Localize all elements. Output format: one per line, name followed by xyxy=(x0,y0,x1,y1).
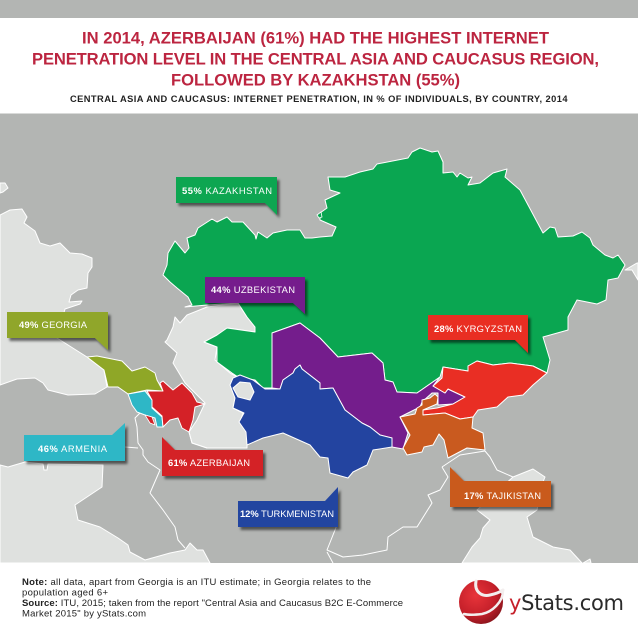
map xyxy=(0,114,638,563)
label: Georgia: 49% GEORGIA xyxy=(19,319,88,330)
country: Kyrgyzstan xyxy=(423,361,547,419)
label: Turkmenistan xyxy=(238,487,338,527)
title: IN 2014, AZERBAIJAN (61%) HAD THE HIGHEST INTERNET xyxy=(82,28,549,48)
label: Georgia xyxy=(7,312,108,350)
footnote text: population aged 6+ xyxy=(22,588,108,598)
footnote text: Source: ITU, 2015; taken from the report "Central Asia and Caucasus B2C E-Commerce xyxy=(22,598,403,609)
country: Turkmenistan xyxy=(230,365,392,478)
map background xyxy=(0,114,638,563)
country: Kazakhstan xyxy=(163,148,625,393)
top band xyxy=(0,0,638,18)
logo: yStats.com xyxy=(459,580,624,624)
label: Azerbaijan: 61% AZERBAIJAN xyxy=(168,457,250,468)
Kazakhstan exclave detail xyxy=(317,212,322,218)
country: Armenia xyxy=(128,391,163,427)
label: Uzbekistan: 44% UZBEKISTAN xyxy=(211,284,295,295)
label: Kazakhstan xyxy=(176,177,277,215)
subtitle: CENTRAL ASIA AND CAUCASUS: INTERNET PENETRATION, IN % OF INDIVIDUALS, BY COUNTRY, 2014 xyxy=(70,94,568,104)
header panel xyxy=(0,18,638,114)
logo sphere xyxy=(459,580,503,624)
label: Turkmenistan: 12% TURKMENISTAN xyxy=(240,508,334,519)
label: Armenia: 46% ARMENIA xyxy=(38,443,108,454)
logo swoosh xyxy=(464,581,503,615)
footnote text: Market 2015" by yStats.com xyxy=(22,608,146,620)
title: PENETRATION LEVEL IN THE CENTRAL ASIA AND CAUCASUS REGION, xyxy=(32,50,599,68)
label: Tajikistan xyxy=(450,467,551,507)
label: Uzbekistan xyxy=(205,277,305,314)
footnote text: Note: all data, apart from Georgia is an ITU estimate; in Georgia relates to the xyxy=(22,577,371,588)
country: Azerbaijan xyxy=(147,381,205,432)
label: Armenia xyxy=(24,423,125,461)
title xyxy=(32,28,599,90)
footnote text xyxy=(22,577,403,620)
title: FOLLOWED BY KAZAKHSTAN (55%) xyxy=(171,70,460,90)
logo wordmark: yStats.com xyxy=(509,591,624,615)
label: Kyrgyzstan xyxy=(428,315,528,353)
border lines xyxy=(125,413,513,563)
light regions xyxy=(0,183,638,563)
footer panel xyxy=(0,563,638,637)
Kara-Bogaz gulf xyxy=(233,382,254,400)
label: Kazakhstan: 55% KAZAKHSTAN xyxy=(182,185,272,196)
country: Nakhchivan xyxy=(145,415,155,425)
country: Tajikistan xyxy=(400,394,485,458)
label: Kyrgyzstan: 28% KYRGYZSTAN xyxy=(434,323,522,334)
label: Azerbaijan xyxy=(162,437,263,476)
country: Georgia xyxy=(87,356,163,394)
country: Uzbekistan xyxy=(272,323,465,449)
label: Tajikistan: 17% TAJIKISTAN xyxy=(464,490,541,501)
